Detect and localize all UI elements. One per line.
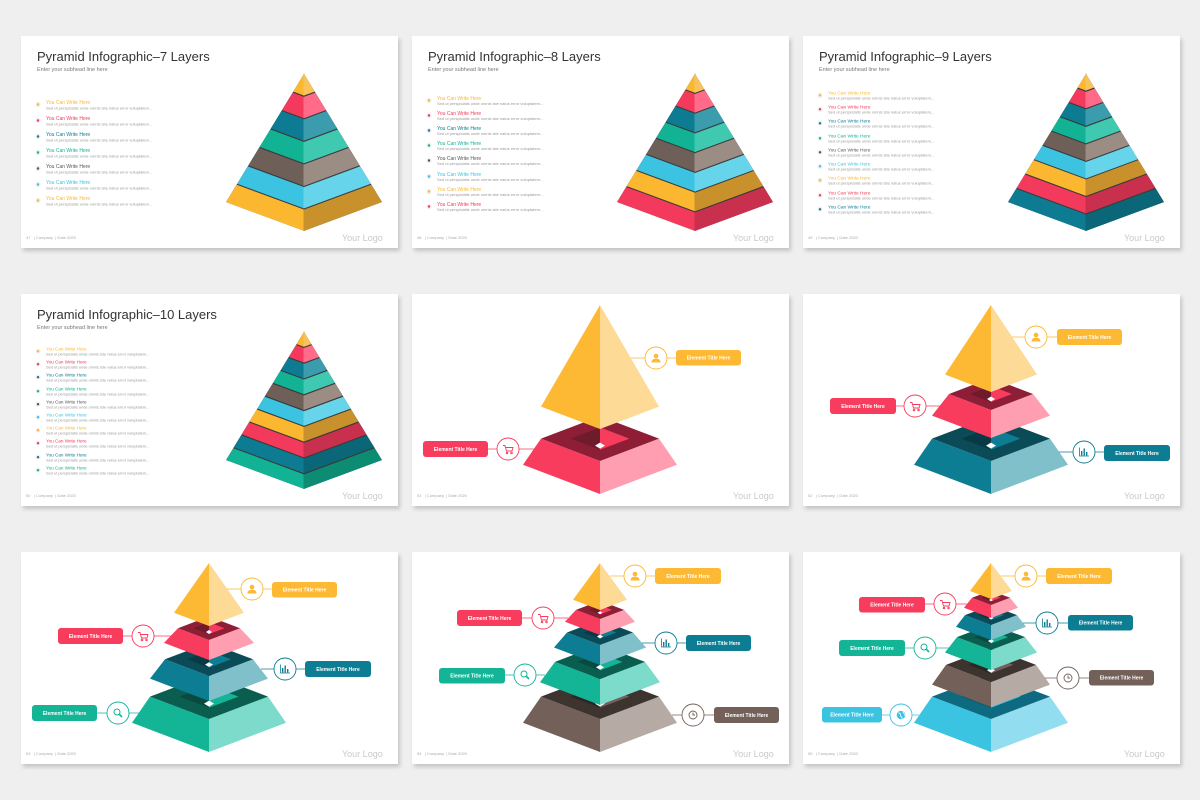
list: 7 items: Sed ut perspiciatis unde omnis iste natus error voluptatem... (46, 105, 152, 110)
title (819, 49, 992, 73)
callout: yellow person: Element Title Here (1068, 335, 1111, 341)
list: 7 items: Sed ut perspiciatis unde omnis iste natus error voluptatem... (46, 201, 152, 206)
callout: teal chart (1023, 612, 1133, 634)
list: 7 items: Sed ut perspiciatis unde omnis iste natus error voluptatem... (46, 169, 152, 174)
list: 10 items: Sed ut perspiciatis unde omnis iste natus error voluptatem... (46, 404, 149, 410)
footer: 49 | Company | Date 2020 (808, 235, 859, 240)
list: 8 items: Sed ut perspiciatis unde omnis iste natus error voluptatem... (437, 146, 543, 151)
list: 9 items (818, 91, 934, 215)
footer: 50 | Company | Date 2020 (26, 493, 77, 498)
slide 3: 9 layers (803, 36, 1180, 248)
footer: 54 | Company | Date 2020 (417, 751, 468, 756)
callout: green search: Element Title Here (850, 646, 894, 652)
callout: pink cart (457, 607, 568, 629)
callout: brown clock (1045, 667, 1154, 689)
pyramid: yellow top (174, 563, 244, 626)
pyramid: pink frustum (932, 378, 1050, 438)
pyramid: yellow top (945, 305, 1037, 392)
footer: 55 | Company | Date 2020 (808, 751, 859, 756)
list: 10 items: You Can Write Here (46, 439, 87, 444)
list: 10 items: Sed ut perspiciatis unde omnis iste natus error voluptatem... (46, 470, 149, 476)
list: 8 items: You Can Write Here (437, 141, 481, 147)
list: 10 items: You Can Write Here (46, 400, 87, 405)
list: 8 items: Sed ut perspiciatis unde omnis iste natus error voluptatem... (437, 131, 543, 136)
title: Enter your subhead line here (819, 67, 890, 73)
list: 10 items (36, 347, 149, 476)
list: 9 items: You Can Write Here (828, 134, 871, 140)
list: 8 items: Sed ut perspiciatis unde omnis iste natus error voluptatem... (437, 101, 543, 106)
title (428, 49, 601, 73)
list: 10 items: You Can Write Here (46, 453, 87, 458)
list: 7 items: You Can Write Here (46, 100, 90, 106)
callout: pink cart (830, 395, 940, 417)
list: 7 items: You Can Write Here (46, 196, 90, 202)
list: 9 items: Sed ut perspiciatis unde omnis iste natus error voluptatem... (828, 153, 934, 158)
footer: Your Logo (733, 749, 774, 759)
list: 9 items: You Can Write Here (828, 176, 871, 182)
list: 9 items: You Can Write Here (828, 191, 871, 197)
list: 10 items: You Can Write Here (46, 426, 87, 431)
pyramid: pink frustum (964, 591, 1018, 618)
slide 9: 6 parts exploded (803, 552, 1180, 764)
list: 7 items: You Can Write Here (46, 180, 90, 186)
list: 9 items: You Can Write Here (828, 148, 871, 154)
pyramid: green frustum (132, 674, 286, 752)
list: 10 items: You Can Write Here (46, 373, 87, 378)
footer (417, 491, 774, 501)
callout: pink cart (423, 438, 534, 460)
list: 9 items: You Can Write Here (828, 105, 871, 111)
list: 9 items: Sed ut perspiciatis unde omnis iste natus error voluptatem... (828, 167, 934, 172)
callout: pink cart: Element Title Here (870, 603, 914, 609)
callout: yellow person: Element Title Here (283, 588, 326, 594)
list: 9 items: Sed ut perspiciatis unde omnis iste natus error voluptatem... (828, 210, 934, 215)
list: 7 items: You Can Write Here (46, 132, 90, 138)
list: 8 items: You Can Write Here (437, 187, 481, 193)
callout: teal chart: Element Title Here (316, 667, 360, 673)
list: 7 items: You Can Write Here (46, 116, 90, 122)
footer (417, 749, 774, 759)
callout: yellow person (227, 578, 337, 600)
stepped pyramid 7 layers (226, 73, 382, 231)
footer (26, 749, 383, 759)
list: 8 items: You Can Write Here (437, 96, 481, 102)
title: Enter your subhead line here (37, 67, 108, 73)
list: 10 items: You Can Write Here (46, 466, 87, 471)
footer: Your Logo (342, 491, 383, 501)
list: 8 items: Sed ut perspiciatis unde omnis iste natus error voluptatem... (437, 116, 543, 121)
list: 9 items: Sed ut perspiciatis unde omnis iste natus error voluptatem... (828, 124, 934, 129)
list: 9 items: You Can Write Here (828, 91, 871, 97)
pyramid: teal frustum (150, 643, 268, 701)
list: 10 items: Sed ut perspiciatis unde omnis iste natus error voluptatem... (46, 444, 149, 448)
list: 9 items: Sed ut perspiciatis unde omnis iste natus error voluptatem... (828, 196, 934, 201)
pyramid: yellow top (970, 563, 1012, 599)
list: 10 items: Sed ut perspiciatis unde omnis iste natus error voluptatem... (46, 364, 149, 370)
list: 10 items: You Can Write Here (46, 387, 87, 392)
list: 7 items (35, 100, 152, 206)
stepped pyramid 10 layers (226, 331, 382, 489)
slide 8: 5 parts exploded (412, 552, 789, 764)
footer (26, 491, 383, 501)
callout: pink cart: Element Title Here (841, 404, 885, 410)
callout: brown clock: Element Title Here (1100, 676, 1143, 682)
footer: Your Logo (342, 749, 383, 759)
list: 7 items: Sed ut perspiciatis unde omnis iste natus error voluptatem... (46, 121, 152, 126)
pyramid: yellow top (573, 563, 627, 610)
footer: Your Logo (733, 491, 774, 501)
callout: yellow person: Element Title Here (687, 356, 730, 362)
footer: 51 | Company | Date 2020 (417, 493, 468, 498)
list: 10 items: Sed ut perspiciatis unde omnis iste natus error voluptatem... (46, 378, 149, 382)
footer: 48 | Company | Date 2020 (417, 235, 468, 240)
footer: 47 | Company | Date 2020 (26, 235, 77, 240)
footer (808, 749, 1165, 759)
list: 10 items: You Can Write Here (46, 347, 87, 352)
callout: pink cart (58, 625, 171, 647)
title: Enter your subhead line here (428, 67, 499, 73)
list: 9 items: Sed ut perspiciatis unde omnis iste natus error voluptatem... (828, 181, 934, 186)
list: 9 items: You Can Write Here (828, 162, 871, 168)
list: 10 items: Sed ut perspiciatis unde omnis iste natus error voluptatem... (46, 430, 149, 436)
callout: yellow person: Element Title Here (1057, 574, 1101, 580)
callout: pink cart: Element Title Here (69, 634, 112, 640)
list: 7 items: You Can Write Here (46, 164, 90, 170)
list: 8 items: Sed ut perspiciatis unde omnis iste natus error voluptatem... (437, 177, 543, 182)
callout: yellow person (1012, 326, 1122, 348)
callout: green search (439, 664, 545, 686)
list: 10 items: Sed ut perspiciatis unde omnis iste natus error voluptatem... (46, 392, 149, 396)
list: 10 items: Sed ut perspiciatis unde omnis iste natus error voluptatem... (46, 418, 149, 422)
list: 8 items: You Can Write Here (437, 111, 481, 117)
list: 10 items: Sed ut perspiciatis unde omnis iste natus error voluptatem... (46, 458, 149, 462)
list: 8 items (426, 96, 543, 212)
list: 8 items: You Can Write Here (437, 156, 481, 162)
list: 8 items: You Can Write Here (437, 202, 481, 208)
callout: green search (839, 637, 949, 659)
list: 7 items: You Can Write Here (46, 148, 90, 154)
list: 9 items: Sed ut perspiciatis unde omnis iste natus error voluptatem... (828, 96, 934, 101)
callout: yellow person (1001, 565, 1112, 587)
callout: teal chart (1059, 441, 1170, 463)
pyramid: yellow top (541, 305, 659, 429)
footer (808, 491, 1165, 501)
callout: cyan globe (822, 704, 919, 726)
list: 8 items: Sed ut perspiciatis unde omnis iste natus error voluptatem... (437, 161, 543, 166)
title: Pyramid Infographic–8 Layers (428, 49, 601, 64)
title: Pyramid Infographic–10 Layers (37, 307, 217, 322)
footer (808, 233, 1165, 243)
stepped pyramid 9 layers (1008, 73, 1164, 231)
list: 9 items: You Can Write Here (828, 205, 871, 211)
list: 8 items: You Can Write Here (437, 126, 481, 132)
callout: teal chart (642, 632, 751, 654)
footer: 52 | Company | Date 2020 (808, 493, 859, 498)
callout: teal chart: Element Title Here (1115, 451, 1159, 457)
pyramid: cyan frustum (914, 674, 1068, 752)
callout: brown clock: Element Title Here (725, 713, 768, 719)
callout: green search: Element Title Here (43, 711, 86, 717)
pyramid: pink frustum (164, 616, 254, 660)
pyramid: pink frustum (523, 416, 677, 494)
footer: Your Logo (1124, 749, 1165, 759)
list: 8 items: Sed ut perspiciatis unde omnis iste natus error voluptatem... (437, 192, 543, 197)
callout: brown clock (672, 704, 779, 726)
callout: pink cart (859, 593, 967, 615)
callout: yellow person (610, 565, 721, 587)
callout: cyan globe: Element Title Here (830, 713, 874, 719)
list: 7 items: Sed ut perspiciatis unde omnis iste natus error voluptatem... (46, 185, 152, 190)
callout: teal chart: Element Title Here (697, 641, 740, 647)
pyramid: pink frustum (565, 601, 635, 635)
pyramid: brown frustum (932, 648, 1050, 707)
list: 7 items: Sed ut perspiciatis unde omnis iste natus error voluptatem... (46, 153, 152, 158)
pyramid: teal frustum (914, 416, 1068, 494)
title (37, 307, 217, 331)
footer: Your Logo (1124, 233, 1165, 243)
stepped pyramid 8 layers (617, 73, 773, 231)
list: 8 items: You Can Write Here (437, 172, 481, 178)
footer (26, 233, 383, 243)
list: 7 items: Sed ut perspiciatis unde omnis iste natus error voluptatem... (46, 137, 152, 142)
list: 10 items: You Can Write Here (46, 360, 87, 365)
callout: green search: Element Title Here (450, 674, 494, 680)
pyramid: teal frustum (956, 605, 1026, 640)
footer (417, 233, 774, 243)
slide 6: 3 parts exploded (803, 294, 1180, 506)
callout: pink cart: Element Title Here (434, 447, 477, 453)
list: 9 items: Sed ut perspiciatis unde omnis iste natus error voluptatem... (828, 110, 934, 115)
callout: pink cart: Element Title Here (468, 616, 511, 622)
title: Enter your subhead line here (37, 325, 108, 331)
slide 1: 7 layers (21, 36, 398, 248)
slide 4: 10 layers (21, 294, 398, 506)
footer: Your Logo (342, 233, 383, 243)
footer: Your Logo (733, 233, 774, 243)
callout: yellow person: Element Title Here (666, 574, 710, 580)
callout: teal chart (261, 658, 371, 680)
pyramid: brown frustum (523, 674, 677, 752)
title: Pyramid Infographic–9 Layers (819, 49, 992, 64)
list: 8 items: Sed ut perspiciatis unde omnis iste natus error voluptatem... (437, 207, 543, 212)
pyramid: teal frustum (554, 620, 646, 665)
footer: Your Logo (1124, 491, 1165, 501)
list: 10 items: You Can Write Here (46, 413, 87, 418)
slide 2: 8 layers (412, 36, 789, 248)
list: 9 items: Sed ut perspiciatis unde omnis iste natus error voluptatem... (828, 139, 934, 144)
title: Pyramid Infographic–7 Layers (37, 49, 210, 64)
title (37, 49, 210, 73)
pyramid: green frustum (540, 645, 660, 705)
footer: 53 | Company | Date 2020 (26, 751, 77, 756)
list: 9 items: You Can Write Here (828, 119, 871, 125)
callout: yellow person (631, 347, 741, 369)
slide 7: 4 parts exploded (21, 552, 398, 764)
callout: green search (32, 702, 139, 724)
pyramid: green frustum (945, 624, 1037, 670)
list: 10 items: Sed ut perspiciatis unde omnis iste natus error voluptatem... (46, 352, 149, 356)
callout: teal chart: Element Title Here (1079, 621, 1122, 627)
slide 5: 2 parts exploded (412, 294, 789, 506)
